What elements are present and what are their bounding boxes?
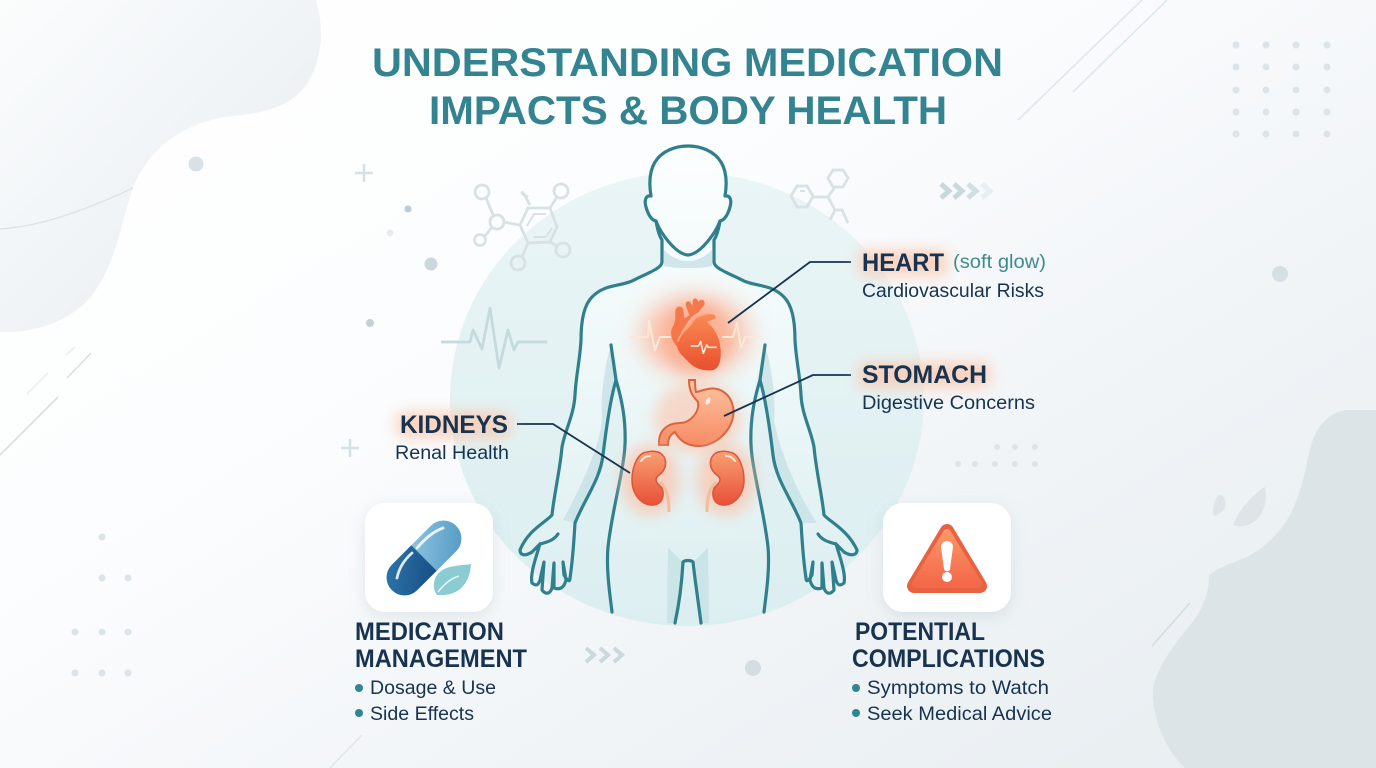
head and torso [645, 146, 731, 262]
panel: medication management: MANAGEMENT [355, 645, 527, 673]
title [372, 41, 1003, 133]
heart glow [640, 295, 750, 375]
left kidney [632, 451, 666, 505]
panel: potential complications: Symptoms to Watch [867, 678, 1049, 699]
icon: ECG pulse background [441, 308, 547, 368]
kidneys [620, 444, 756, 516]
icon: molecule left [474, 184, 570, 270]
human body outline [520, 146, 857, 623]
background circle [450, 172, 924, 626]
label: stomach [858, 361, 1035, 414]
stomach [654, 380, 742, 454]
label: stomach: Digestive Concerns [862, 393, 1035, 414]
card: pill icon [365, 503, 493, 612]
chevrons: top right [941, 184, 990, 198]
label: heart: Cardiovascular Risks [862, 281, 1044, 302]
panel: potential complications: POTENTIAL [855, 618, 985, 646]
callout lines [517, 262, 851, 473]
label: heart: HEART [862, 249, 944, 277]
card: warning icon [883, 503, 1011, 612]
heart anatomy [671, 299, 721, 370]
label: kidneys: KIDNEYS [400, 411, 508, 439]
title: UNDERSTANDING MEDICATION [372, 41, 1003, 85]
panel: potential complications: Seek Medical Advice [867, 704, 1052, 725]
heart [630, 295, 760, 375]
label: heart: (soft glow) [953, 252, 1046, 273]
title: IMPACTS & BODY HEALTH [429, 89, 947, 133]
panel: medication management: Dosage & Use [370, 678, 496, 699]
panel: medication management: MEDICATION [355, 618, 504, 646]
neck and limb shading [563, 250, 817, 623]
panel: potential complications [852, 503, 1052, 725]
label: kidneys [395, 411, 510, 464]
pulse lines [630, 321, 760, 350]
label: heart [858, 249, 1046, 302]
dot grids and scattered dots [72, 42, 1330, 676]
panel: medication management: Side Effects [370, 704, 474, 725]
panel: potential complications: COMPLICATIONS [852, 645, 1045, 673]
chevrons: bottom [586, 648, 622, 662]
label: stomach: STOMACH [862, 361, 987, 389]
icon: molecule right [791, 170, 848, 223]
ureters [660, 482, 716, 512]
label: kidneys: Renal Health [395, 443, 509, 464]
right kidney [710, 451, 744, 505]
panel: medication management [355, 503, 527, 725]
